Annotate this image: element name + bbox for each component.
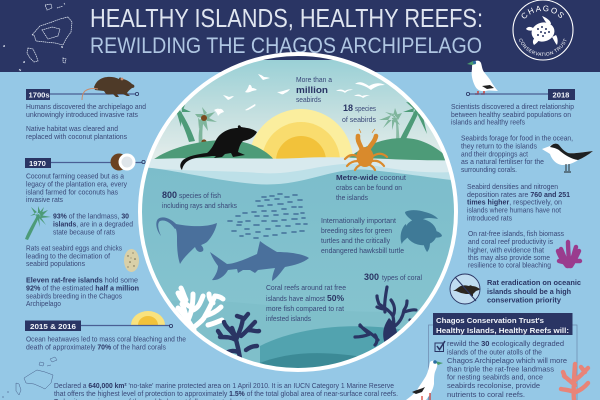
circle captions: more fish compared to rat: [266, 306, 344, 313]
circle captions: endangered hawksbill turtle: [321, 248, 404, 255]
circle captions: 50%: [327, 293, 344, 303]
text: ocean heatwaves: death of approximately 70% of the hard corals: [26, 344, 167, 352]
icon: brown rat: [82, 77, 134, 100]
icon: purple coral: [558, 242, 580, 266]
circle captions: turtles and the critically: [321, 238, 391, 245]
panel: Healthy Islands, Healthy Reefs will: for nesting seabirds and, once: [447, 374, 543, 382]
logo: Chagos Conservation Trust: [512, 0, 574, 60]
timeline 1700s: [26, 89, 139, 100]
panel: Healthy Islands, Healthy Reefs will: rewild the 30 ecologically degraded: [447, 341, 564, 348]
text: seabirds forage: Seabirds forage for food in the ocean,: [461, 136, 573, 142]
logo: Chagos Conservation Trust: CONSERVATION TRUST: [519, 38, 567, 56]
panel: Healthy Islands, Healthy Reefs will: than triple the rat-free landmass: [447, 366, 555, 374]
text: 93% of the landmass: [53, 214, 133, 236]
coconut crab: [345, 129, 387, 170]
timeline 2015 and 2016: [25, 320, 173, 331]
text: fish biomass: resilience to coral bleaching: [468, 262, 551, 270]
timeline 2018: 2018: [552, 90, 569, 100]
text: rats eat seabird eggs: leading to the decimation of: [26, 254, 110, 260]
text: seabird densities: introduced rats: [467, 216, 513, 222]
timeline 2018: [466, 89, 575, 100]
circle captions: Metre-wide coconut: [336, 173, 406, 182]
callout: rat eradication: Rat eradication on oceanic: [487, 278, 581, 287]
timeline 2015 and 2016: 2015 & 2016: [30, 322, 76, 331]
circle captions: seabirds: [296, 97, 322, 104]
icon: coconut: [110, 154, 136, 170]
text: 1970: island farmed for coconuts has: [26, 190, 119, 196]
seabirds in the sky: [214, 74, 385, 116]
text: seabird densities: deposition rates are 760 and 251: [467, 192, 570, 199]
white coral: [178, 288, 223, 330]
text: 2018 discovery: Scientists discovered a direct relationship: [451, 104, 574, 111]
text: 1970: legacy of the plantation era, every: [26, 182, 128, 188]
panel: Healthy Islands, Healthy Reefs will: Chagos Conservation Trust's: [436, 316, 544, 325]
circle captions: including rays and sharks: [162, 203, 238, 210]
text: 2018 discovery: islands and healthy reefs: [451, 120, 526, 126]
icon: red-footed booby top: [467, 61, 498, 94]
text: 2018 discovery: between healthy seabird populations on: [451, 112, 571, 119]
text: 1970: [26, 174, 128, 204]
text: seabirds forage: surrounding corals.: [461, 167, 517, 174]
text: 1700s: unknowingly introduced invasive rats: [26, 112, 139, 119]
logo: Chagos Conservation Trust: CHAGOS: [522, 6, 564, 18]
circle captions: 300: [364, 272, 379, 282]
panel: Healthy Islands, Healthy Reefs will: [428, 313, 577, 400]
text: 1970: Coconut farming ceased but as a: [26, 174, 124, 180]
text: 2018 discovery: [451, 104, 574, 126]
text: eleven rat-free islands: 92% of the estimated half a million: [26, 286, 139, 292]
sea turtle: [401, 210, 442, 252]
circle captions: Coral reefs around rat free: [266, 285, 346, 292]
navy coral right: [355, 287, 424, 345]
timeline 1700s: 1700s: [28, 90, 50, 100]
water surface and sea: [142, 157, 454, 368]
circle captions: 800: [162, 190, 177, 200]
circle captions: More than a: [296, 77, 332, 84]
text: 93% of the landmass: state because of rats: [53, 230, 116, 236]
circle captions: 18: [343, 103, 353, 113]
callout: rat eradication: islands should be a high: [487, 287, 571, 296]
text: 1700s: Native habitat was cleared and: [26, 126, 118, 133]
text: fish biomass: this may also provide some: [468, 255, 550, 262]
text: seabird densities: islands where humans have not: [467, 208, 561, 214]
text: fish biomass: [468, 231, 565, 270]
text: eleven rat-free islands: seabirds breeding in the Chagos: [26, 294, 123, 300]
text: seabirds forage: [461, 136, 573, 174]
text: seabirds forage: and their droppings act: [461, 152, 528, 158]
title: HEALTHY ISLANDS, HEALTHY REEFS:: [90, 3, 483, 33]
icon: palm tree: [25, 206, 51, 240]
shark: [210, 241, 309, 281]
text: ocean heatwaves: Ocean heatwaves led to mass coral bleaching and the: [26, 336, 186, 344]
text: 1970: invasive rats: [26, 197, 64, 204]
navy coral: [218, 314, 259, 358]
manta ray: [156, 217, 217, 264]
text: 93% of the landmass: islands, are in a degraded: [53, 222, 133, 228]
icon: speckled egg: [124, 249, 139, 272]
title: [90, 3, 483, 58]
black rat silhouette: [180, 125, 257, 170]
circle captions: species: [355, 106, 376, 113]
text: seabird densities: times higher, respectively, on: [467, 200, 562, 206]
left island with palms: [154, 104, 274, 159]
text: marine protected area: [54, 383, 398, 400]
callout: rat eradication: [487, 278, 581, 304]
text: rats eat seabird eggs: Rats eat seabird eggs and chicks: [26, 246, 123, 252]
central circular scene: [138, 52, 458, 372]
text: 1700s: Humans discovered the archipelago and: [26, 104, 146, 111]
timeline 1970: 1970: [29, 159, 46, 168]
circle captions: of seabirds: [342, 117, 377, 124]
icon: pink coral: [561, 364, 588, 400]
text: seabirds forage: as a natural fertiliser for the: [461, 159, 544, 166]
circle captions: species of fish: [179, 193, 221, 200]
text: 1700s: replaced with coconut plantations: [26, 134, 128, 141]
panel: Healthy Islands, Healthy Reefs will: seabirds recolonise, provide: [447, 383, 540, 390]
text: eleven rat-free islands: Archipelago: [26, 301, 61, 308]
text: ocean heatwaves: [26, 336, 186, 352]
icon: red-footed booby bottom: [406, 360, 443, 400]
text: rats eat seabird eggs: seabird populations: [26, 261, 86, 268]
icon: half sun: [131, 311, 165, 325]
text: 1700s: [26, 104, 146, 141]
circle captions: breeding sites for green: [321, 228, 392, 235]
text: marine protected area: Declared a 640,000 km² 'no-take' marine protected area on 1 April 2010. It is an IUCN Category 1 Marine Reserve: [54, 383, 394, 390]
text: marine protected area: that offers the highest level of protection to approximately 1.5% of the total global area of near-surface coral reefs.: [54, 391, 398, 398]
icon: no rats: [450, 274, 480, 304]
circle captions: [162, 77, 422, 323]
circle captions: types of coral: [382, 275, 422, 282]
text: seabirds forage: they return to the islands: [461, 144, 538, 150]
sun: [252, 109, 352, 159]
text: rats eat seabird eggs: [26, 246, 123, 268]
header band: [0, 0, 600, 72]
circle captions: islands have almost: [266, 296, 325, 303]
circle captions: infested islands: [266, 316, 312, 323]
small map outline: [2, 357, 57, 398]
text: 93% of the landmass: 93% of the landmass, 30: [53, 214, 129, 220]
fish shoal: [228, 194, 307, 238]
title: REWILDING THE CHAGOS ARCHIPELAGO: [90, 33, 482, 58]
text: seabird densities: Seabird densities and nitrogen: [467, 184, 558, 191]
text: eleven rat-free islands: [26, 278, 139, 308]
text: fish biomass: and coral reef productivity is: [468, 239, 554, 246]
circle captions: million: [296, 84, 328, 95]
callout: rat eradication: conservation priority: [487, 296, 562, 304]
timeline 1970: [25, 158, 145, 168]
map of Chagos outline: [3, 3, 72, 71]
text: fish biomass: On rat-free islands, fish biomass: [468, 231, 565, 238]
circle captions: the islands: [336, 195, 369, 202]
circle captions: Internationally important: [321, 218, 396, 225]
text: seabird densities: [467, 184, 570, 222]
panel: Healthy Islands, Healthy Reefs will: nutrients to coral reefs.: [447, 392, 525, 399]
icon: checkbox: [435, 341, 445, 352]
text: fish biomass: higher, with evidence that: [468, 248, 544, 254]
panel: Healthy Islands, Healthy Reefs will: islands of the outer atolls of the: [447, 350, 542, 356]
text: eleven rat-free islands: Eleven rat-free islands hold some: [26, 278, 138, 284]
circle captions: crabs can be found on: [336, 185, 402, 192]
panel: Healthy Islands, Healthy Reefs will: Chagos Archipelago which will more: [447, 358, 567, 365]
icon: sooty tern: [542, 144, 593, 172]
right island with palms: [349, 102, 446, 160]
panel: Healthy Islands, Healthy Reefs will: Healthy Islands, Healthy Reefs will:: [436, 326, 569, 335]
